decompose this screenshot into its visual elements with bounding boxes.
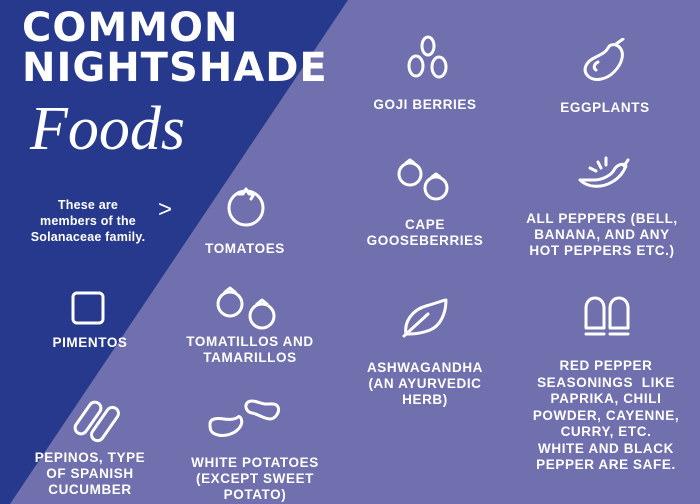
label: seasonings: CURRY, ETC. <box>561 424 651 439</box>
title <box>22 5 328 91</box>
icon: leaf <box>402 298 448 338</box>
icon: goji <box>408 36 448 78</box>
intro text: members of the <box>40 214 136 228</box>
label: tomatillos: TOMATILLOS AND <box>186 334 314 349</box>
label: eggplant: EGGPLANTS <box>560 100 650 115</box>
title: NIGHTSHADE <box>22 45 328 91</box>
intro text: These are <box>58 198 118 212</box>
icon: shakers <box>584 296 630 336</box>
label: pepinos: PEPINOS, TYPE <box>35 450 145 465</box>
label: all peppers: BANANA, AND ANY <box>534 227 670 242</box>
label: cape gooseberries <box>367 217 483 248</box>
arrow: > <box>158 196 172 223</box>
label: all peppers: HOT PEPPERS ETC.) <box>529 243 675 258</box>
label: ashwagandha: (AN AYURVEDIC <box>368 376 482 391</box>
label: ashwagandha: ASHWAGANDHA <box>367 360 483 375</box>
icon: eggplant <box>584 38 625 81</box>
icon: tomatillos <box>216 286 276 330</box>
label: seasonings: RED PEPPER <box>559 358 653 373</box>
label: ashwagandha: HERB) <box>402 392 448 407</box>
label: seasonings: PEPPER ARE SAFE. <box>536 457 676 472</box>
icon: pepper <box>578 156 630 188</box>
label: seasonings: SEASONINGS LIKE <box>537 374 675 390</box>
label: cape gooseberries: GOOSEBERRIES <box>367 233 483 248</box>
label: seasonings: POWDER, CAYENNE, <box>533 408 679 422</box>
label: pepinos <box>35 450 145 497</box>
icon: potatoes <box>208 400 280 437</box>
title: COMMON <box>22 5 238 51</box>
intro text <box>31 198 145 244</box>
label: cape gooseberries: CAPE <box>405 217 445 232</box>
label: seasonings <box>533 358 679 472</box>
label: potatoes: POTATO) <box>224 487 286 502</box>
script subtitle: Foods <box>30 95 185 163</box>
intro text: Solanaceae family. <box>31 230 145 244</box>
label: seasonings: WHITE AND BLACK <box>538 440 674 456</box>
label: seasonings: PAPRIKA, CHILI <box>551 391 661 406</box>
label: tomatillos: TAMARILLOS <box>203 350 297 365</box>
label: potatoes: WHITE POTATOES <box>191 455 319 470</box>
label: goji: GOJI BERRIES <box>373 97 477 112</box>
label: potatoes: (EXCEPT SWEET <box>196 471 314 486</box>
label: pepinos: OF SPANISH <box>46 466 134 481</box>
label: ashwagandha <box>367 360 483 407</box>
label: all peppers: ALL PEPPERS (BELL, <box>526 211 678 226</box>
label: pimentos: PIMENTOS <box>52 335 128 350</box>
label: pepinos: CUCUMBER <box>48 482 132 497</box>
label: all peppers <box>526 211 678 258</box>
icon: pimento <box>72 292 104 324</box>
icon: cape gooseberries <box>398 158 448 200</box>
icon: tomato <box>228 187 264 226</box>
icon: pepinos <box>74 400 120 442</box>
label: tomatillos <box>186 334 314 365</box>
label: tomatoes: TOMATOES <box>205 241 285 256</box>
label: potatoes <box>191 455 319 502</box>
